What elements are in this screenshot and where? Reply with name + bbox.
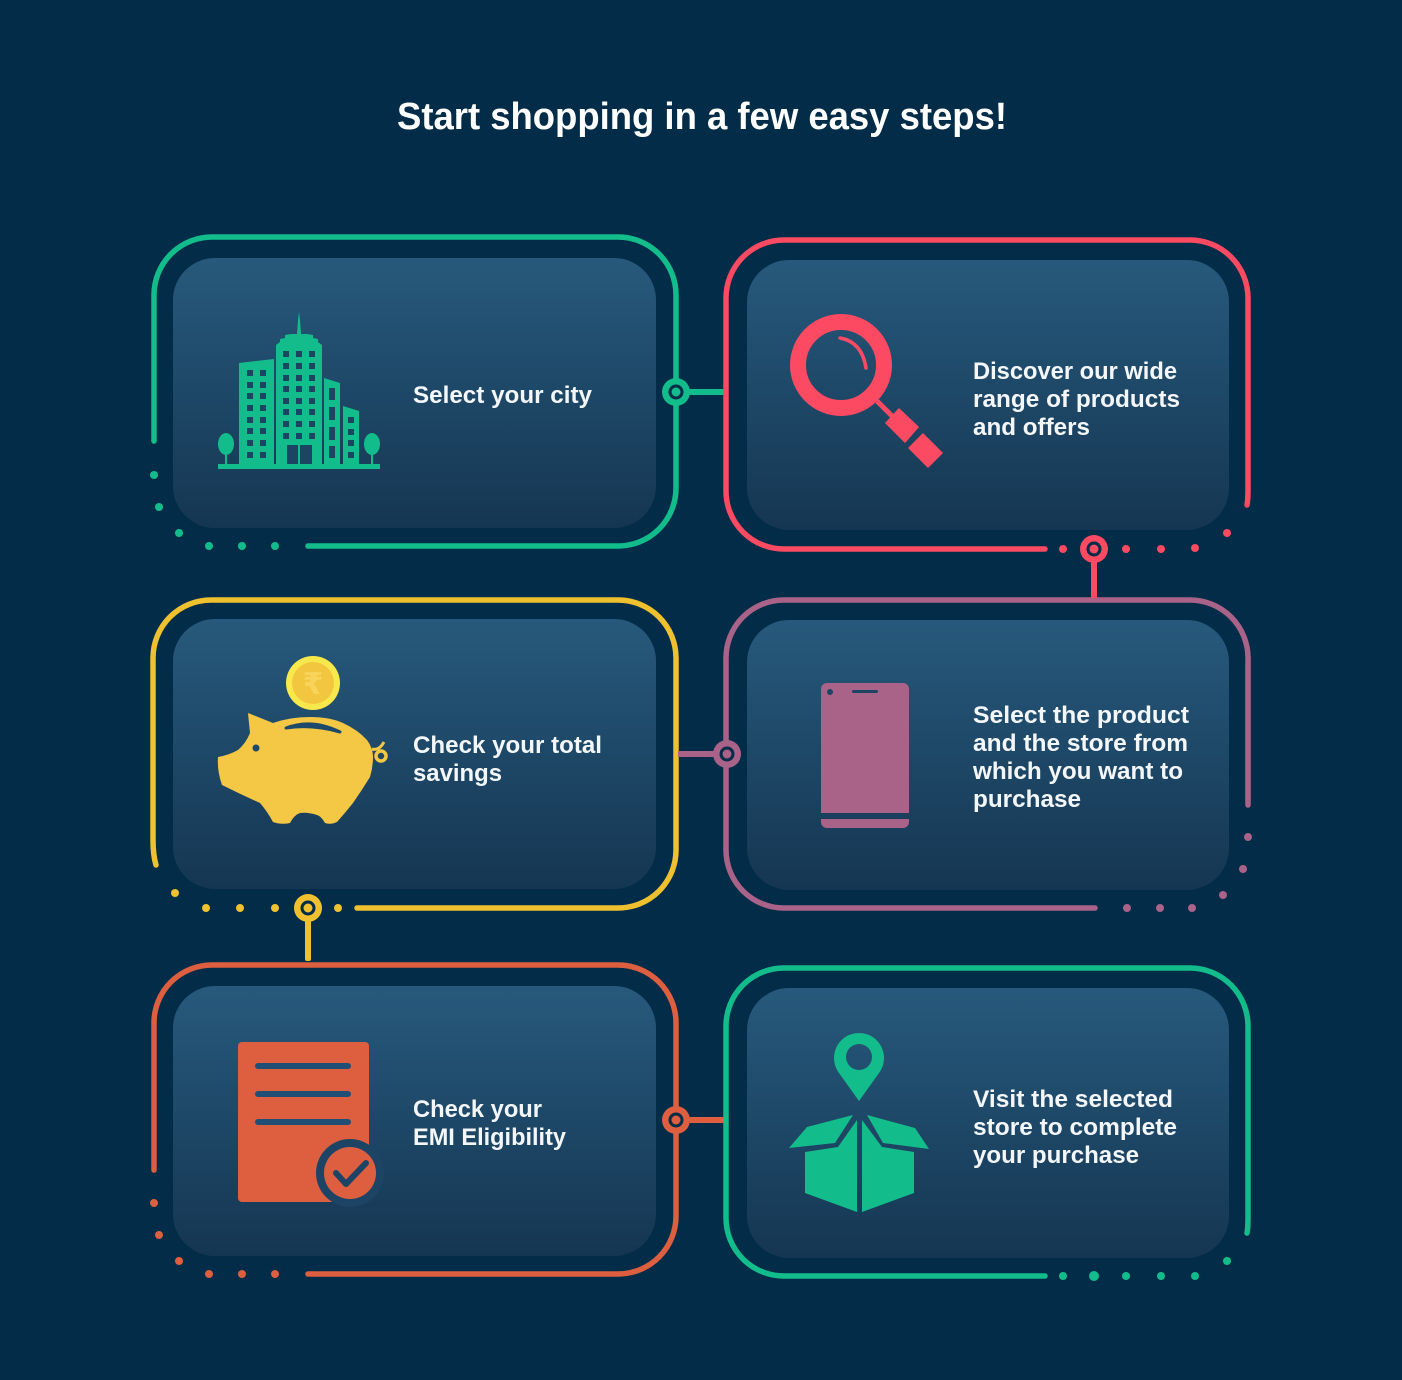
icon: smartphone [821,683,909,828]
card background [747,988,1229,1258]
label: range of products [973,386,1180,413]
connector: step 4 to step 5 [662,1106,726,1134]
label: and offers [973,414,1090,441]
connector: step 1 to step 2 [662,378,726,406]
panel: visit store [726,968,1248,1281]
card background [747,620,1229,890]
label: Visit the selected [973,1086,1173,1113]
orange border with dots [150,965,676,1278]
card background [173,986,656,1256]
panel: check savings [153,600,676,912]
label [413,1096,567,1151]
label: Select your city [413,382,593,409]
label: which you want to [972,758,1183,785]
label [972,702,1189,813]
label [973,1086,1177,1169]
card background [747,260,1229,530]
icon: package with location pin [789,1033,929,1212]
label: purchase [973,786,1081,813]
icon: document with check mark [238,1042,384,1207]
green border with dots [726,968,1248,1281]
label: your purchase [973,1142,1139,1169]
connector: step 3 to step 4 [678,740,741,768]
label: Discover our wide [973,358,1177,385]
icon: city buildings [218,312,380,469]
title: Start shopping in a few easy steps! [397,96,1007,138]
panel: discover products [726,240,1248,553]
icon: rupee coin [286,656,340,710]
card background [173,619,656,889]
red border with dots [726,240,1248,553]
icon: piggy bank with coin [218,656,386,824]
label [413,732,602,787]
panel: select your city [150,237,676,550]
purple border with dots [726,600,1252,912]
panel: check EMI eligibility [150,965,676,1278]
green border with dots [150,237,676,550]
label: EMI Eligibility [413,1124,567,1151]
label: and the store from [973,730,1188,757]
label: Check your total [413,732,602,759]
label: savings [413,760,502,787]
icon: magnifying glass [798,322,942,467]
label: store to complete [973,1114,1177,1141]
label: Select the product [973,702,1189,729]
connector: yellow step 3 to orange panel [294,894,322,961]
icon: rupee coin: ₹ [303,667,323,702]
card background [173,258,656,528]
yellow border with dots [153,600,676,912]
connector: step 2 to step 3 [1080,535,1108,598]
label [973,358,1180,441]
label: Check your [413,1096,542,1123]
panel: select product [726,600,1252,912]
